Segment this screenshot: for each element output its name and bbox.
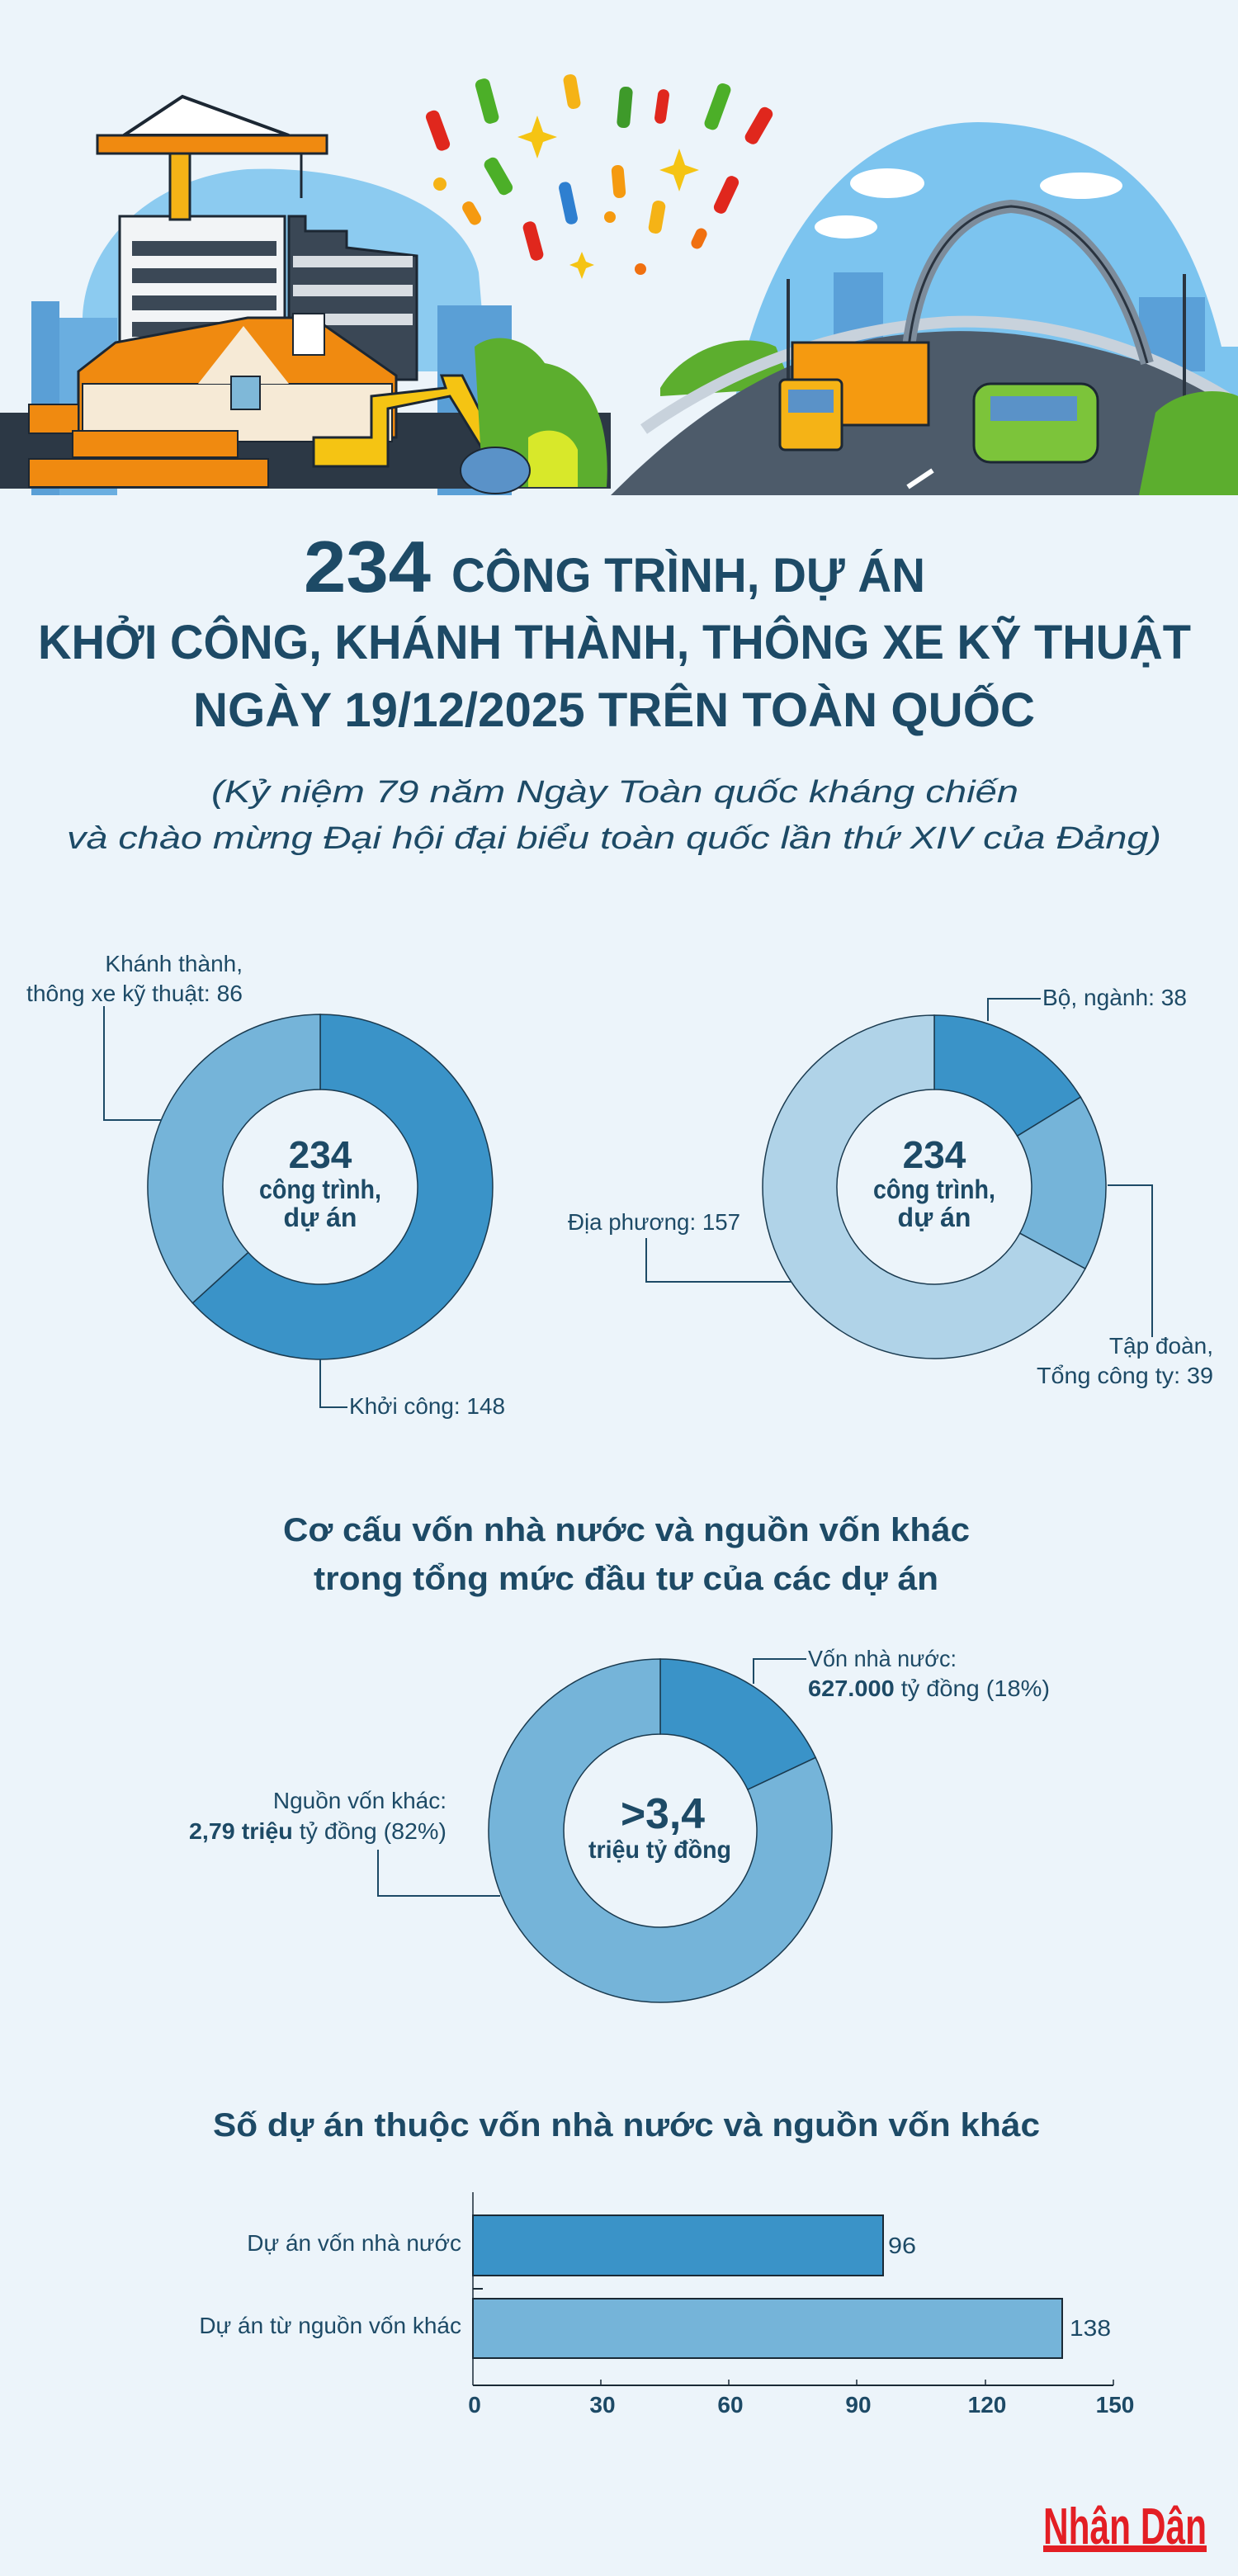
bar chart: projects by funding: 0 <box>468 2392 481 2418</box>
bar chart: projects by funding: 90 <box>845 2392 872 2418</box>
donut chart: capital structure: >3,4 <box>621 1790 705 1838</box>
donut chart: by managing entity: dự án <box>898 1203 971 1232</box>
bar chart: projects by funding: 120 <box>968 2392 1006 2418</box>
bar chart: projects by funding: 30 <box>589 2392 616 2418</box>
donut chart: by managing entity: Tập đoàn, <box>1109 1333 1213 1359</box>
section heading: capital structure <box>283 1512 970 1597</box>
donut chart: capital structure: Nguồn vốn khác: <box>273 1788 447 1813</box>
bar chart: projects by funding: Dự án từ nguồn vốn khác <box>199 2313 461 2338</box>
donut chart: capital structure: triệu tỷ đồng <box>588 1836 731 1864</box>
illustration: confetti <box>424 73 775 279</box>
bar: state capital <box>473 2215 883 2276</box>
section heading: number of projects: Số dự án thuộc vốn nhà nước và nguồn vốn khác <box>213 2107 1040 2144</box>
section heading: capital structure: Cơ cấu vốn nhà nước và nguồn vốn khác <box>283 1512 970 1548</box>
donut chart: start vs inauguration: thông xe kỹ thuật: 86 <box>26 981 243 1006</box>
title: NGÀY 19/12/2025 TRÊN TOÀN QUỐC <box>193 683 1035 737</box>
bar: other capital <box>473 2299 1062 2358</box>
donut chart: capital structure: 2,79 triệu tỷ đồng (82%) <box>189 1818 447 1844</box>
title <box>38 526 1191 737</box>
title: KHỞI CÔNG, KHÁNH THÀNH, THÔNG XE KỸ THUẬT <box>38 616 1191 669</box>
bar chart: projects by funding <box>199 2192 1134 2418</box>
donut chart: by managing entity: Địa phương: 157 <box>568 1209 740 1235</box>
bar chart: projects by funding: Dự án vốn nhà nước <box>247 2230 461 2256</box>
donut chart: capital structure: Vốn nhà nước: <box>808 1646 957 1671</box>
donut chart: start vs inauguration <box>26 951 505 1419</box>
donut chart: start vs inauguration: Khởi công: 148 <box>349 1393 505 1419</box>
donut chart: by managing entity <box>568 985 1213 1388</box>
donut chart: start vs inauguration: Khánh thành, <box>105 951 243 976</box>
donut chart: capital structure: 627.000 tỷ đồng (18%) <box>808 1676 1050 1701</box>
donut chart: by managing entity: Tổng công ty: 39 <box>1037 1363 1213 1388</box>
donut chart: start vs inauguration: dự án <box>284 1203 357 1232</box>
bar chart: projects by funding: 138 <box>1070 2315 1111 2341</box>
bar chart: projects by funding: 150 <box>1096 2392 1134 2418</box>
bar chart: projects by funding: 60 <box>717 2392 744 2418</box>
donut chart: capital structure <box>189 1646 1050 2002</box>
donut chart: start vs inauguration: công trình, <box>259 1175 381 1204</box>
title: 234 <box>304 526 431 607</box>
donut chart: start vs inauguration: 234 <box>289 1133 352 1176</box>
subtitle: (Kỷ niệm 79 năm Ngày Toàn quốc kháng chiến <box>211 775 1018 810</box>
illustration: construction and bridge scene <box>0 73 1238 495</box>
subtitle: và chào mừng Đại hội đại biểu toàn quốc lần thứ XIV của Đảng) <box>67 821 1161 856</box>
subtitle <box>67 775 1161 856</box>
section heading: capital structure: trong tổng mức đầu tư của các dự án <box>314 1561 938 1597</box>
illustration: right bridge and road <box>611 122 1238 495</box>
illustration: left construction site <box>0 97 611 495</box>
bar chart: projects by funding: 96 <box>888 2233 916 2258</box>
title: CÔNG TRÌNH, DỰ ÁN <box>451 549 925 603</box>
donut chart: by managing entity: 234 <box>903 1133 966 1176</box>
donut chart: by managing entity: công trình, <box>873 1175 995 1204</box>
donut chart: by managing entity: Bộ, ngành: 38 <box>1042 985 1187 1010</box>
